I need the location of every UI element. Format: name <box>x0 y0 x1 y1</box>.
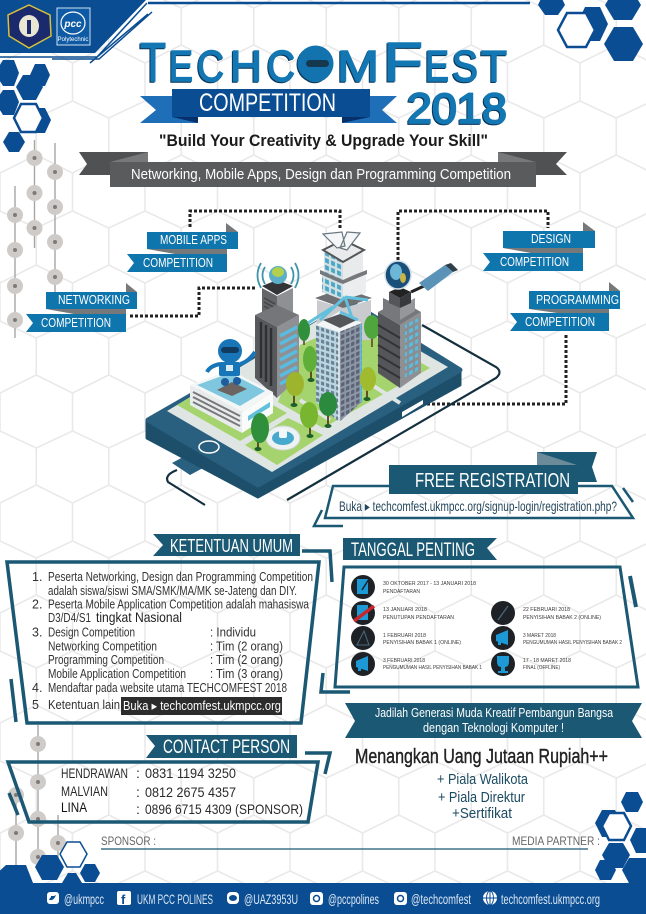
label: programming competition: COMPETITION <box>525 314 595 329</box>
banner: competition categories <box>79 152 567 187</box>
label: mobile apps competition: MOBILE APPS <box>160 233 227 247</box>
rules list: tingkat Nasional <box>96 609 182 625</box>
label: programming competition <box>510 282 620 331</box>
schedule dates: 13 JANUARI 2018 <box>383 607 427 613</box>
rules list: D3/D4/S1 <box>48 611 91 625</box>
footer social links: @UAZ3953U <box>244 891 298 907</box>
heading: tanggal penting: TANGGAL PENTING <box>351 540 475 561</box>
sponsor and media partner line <box>101 836 600 849</box>
illustration: isometric smartphone city <box>147 232 500 505</box>
title: TechcomFest <box>140 31 507 93</box>
panel: free registration <box>314 452 633 526</box>
schedule dates: PENGUMUMAN HASIL PENYISIHAN BABAK 1 <box>383 665 482 671</box>
trees behind <box>298 315 380 347</box>
title: TechcomFest: M <box>337 42 379 91</box>
icon: twitter <box>47 892 59 904</box>
schedule dates: 30 OKTOBER 2017 - 13 JANUARI 2018 <box>383 581 476 587</box>
label: mobile apps competition: COMPETITION <box>143 255 213 270</box>
rules list: 4. <box>32 681 42 695</box>
title: TechcomFest: E <box>169 42 193 91</box>
title: TechcomFest: H <box>230 42 262 91</box>
contact list: : <box>136 765 140 781</box>
schedule dates: 17 - 18 MARET 2018 <box>523 658 571 664</box>
label: networking competition: COMPETITION <box>41 315 111 330</box>
fountain <box>266 426 300 450</box>
schedule dates <box>383 581 622 671</box>
icon: USB plug <box>411 263 458 292</box>
title: TechcomFest: T <box>481 42 507 91</box>
left tower <box>255 280 299 398</box>
schedule dates: PENGUMUMAN HASIL PENYISIHAN BABAK 2 <box>523 640 622 646</box>
panel: tanggal penting <box>335 538 638 687</box>
contact list: : <box>136 801 140 817</box>
decorative beads: lower left <box>8 725 66 870</box>
schedule dates: 22 FEBRUARI 2018 <box>523 607 570 613</box>
contact list: 0831 1194 3250 <box>145 765 236 781</box>
schedule dates: 1 FEBRUARI 2018 <box>383 633 426 639</box>
footer social links: @ukmpcc <box>64 891 104 907</box>
contact list: HENDRAWAN <box>61 765 128 781</box>
heading: ketentuan umum: KETENTUAN UMUM <box>170 536 293 556</box>
rules list: Mobile Application Competition <box>48 667 186 681</box>
contact list: 0812 2675 4357 <box>145 784 236 800</box>
trees in front <box>251 346 376 451</box>
back tower <box>315 232 372 340</box>
center tower <box>308 297 368 422</box>
title: TechcomFest: C <box>267 42 295 91</box>
phone body <box>147 303 460 497</box>
rules list: 3. <box>32 626 42 640</box>
rules list: Programming Competition <box>48 653 164 667</box>
schedule dates: PENDAFTARAN <box>383 589 420 595</box>
schedule dates: FINAL (OFFLINE) <box>523 665 560 671</box>
icon: round 2 announcement <box>491 626 515 650</box>
title: TechcomFest: F <box>383 31 423 93</box>
schedule dates: PENUTUPAN PENDAFTARAN <box>383 615 454 621</box>
icon: round 1 announcement <box>351 652 375 676</box>
heading: year 2018: 2018 <box>407 85 507 133</box>
label: mobile apps competition <box>127 223 238 272</box>
contact list: LINA <box>61 799 88 815</box>
contact list <box>61 765 303 817</box>
icon: globe on right tower <box>385 261 411 289</box>
decorative hexagons: top right <box>538 0 643 61</box>
rules list: 2. <box>32 598 42 612</box>
icon: trophy <box>491 652 515 676</box>
robot mascot <box>207 339 255 396</box>
contact list: : <box>136 784 140 800</box>
phone connector <box>172 456 203 475</box>
low building <box>190 370 273 433</box>
label: design competition: COMPETITION <box>500 254 569 269</box>
panel: ketentuan umum <box>7 534 350 723</box>
label: networking competition <box>26 283 137 332</box>
prizes text <box>355 746 608 822</box>
label: networking competition: NETWORKING <box>58 293 130 307</box>
sponsor and media partner line: SPONSOR : <box>101 836 156 848</box>
heading: contact person <box>146 735 297 758</box>
icon: facebook <box>117 891 131 907</box>
header band with logos <box>0 0 530 63</box>
rules list: Peserta Mobile Application Competition adalah mahasiswa <box>48 598 309 612</box>
schedule dates: 3 FEBRUARI 2018 <box>383 658 425 664</box>
green city blocks <box>177 322 430 465</box>
prizes text: + Piala Walikota <box>437 771 529 788</box>
prizes text: + Piala Direktur <box>438 789 525 806</box>
banner: jadilah generasi muda <box>345 703 642 738</box>
footer social links <box>47 891 600 907</box>
cable <box>167 325 499 505</box>
label: design competition: DESIGN <box>531 232 571 246</box>
rules list: Buka ▸ techcomfest.ukmpcc.org <box>123 699 281 713</box>
decorative hexagons: top left <box>0 60 51 152</box>
rules list <box>32 570 313 715</box>
decorative beads: upper left <box>7 140 63 338</box>
title: TechcomFest: S <box>452 42 478 91</box>
rules list: Peserta Networking, Design dan Programming Competition <box>48 570 313 584</box>
tagline: "Build Your Creativity & Upgrade Your Skill" <box>159 131 488 150</box>
footer social links: UKM PCC POLINES <box>137 891 213 907</box>
icon: globe <box>483 891 497 905</box>
right tower <box>378 287 421 388</box>
rules list: Design Competition <box>48 626 135 640</box>
sponsor and media partner line: MEDIA PARTNER : <box>512 836 600 848</box>
rules list: Ketentuan lain <box>48 698 120 712</box>
icon: globe with wifi signal <box>258 263 298 288</box>
rules list: : Individu <box>210 626 256 640</box>
rules list: Mendaftar pada website utama TECHCOMFEST 2018 <box>48 681 287 695</box>
title: TechcomFest: O <box>301 42 330 91</box>
icon: PCC logo: pcc <box>63 19 82 30</box>
prizes text: +Sertifikat <box>452 805 513 822</box>
panel: free registration: FREE REGISTRATION <box>415 469 570 492</box>
contact list: MALVIAN <box>61 783 108 799</box>
rules list: 5 <box>32 698 39 712</box>
label: design competition <box>483 222 595 271</box>
icon: registration open <box>351 575 375 599</box>
schedule dates: PENYISIHAN BABAK 1 (ONLINE) <box>383 640 461 646</box>
rules list: : Tim (3 orang) <box>210 667 283 681</box>
banner: Competition <box>140 89 397 123</box>
footer social links: @pccpolines <box>328 891 379 907</box>
rules list: : Tim (2 orang) <box>210 653 283 667</box>
dotted connector lines <box>130 211 566 404</box>
icon: line <box>227 892 239 904</box>
icon: PCC logo: Polytechnic <box>58 37 88 43</box>
panel: contact person <box>8 735 330 822</box>
rules list: adalah siswa/siswi SMA/SMK/MA/MK se-Jateng dan DIY. <box>48 584 297 598</box>
banner: jadilah generasi muda: dengan Teknologi Komputer ! <box>423 720 564 735</box>
icon: instagram <box>310 892 323 905</box>
contact list: 0896 6715 4309 (SPONSOR) <box>145 801 303 817</box>
icon: round 2 <box>491 601 515 625</box>
icon: university logo <box>8 5 51 48</box>
decorative hexagons: bottom right <box>595 792 646 883</box>
heading: contact person: CONTACT PERSON <box>163 737 290 758</box>
icon: instagram <box>394 892 407 905</box>
title: TechcomFest: T <box>140 31 166 93</box>
icon: facebook: f <box>121 892 126 907</box>
title: TechcomFest: C <box>197 42 224 91</box>
icon: registration closed <box>351 601 375 625</box>
label: programming competition: PROGRAMMING <box>536 293 619 307</box>
icon: PCC logo <box>57 8 90 45</box>
rules list: : Tim (2 orang) <box>210 640 283 654</box>
heading: ketentuan umum <box>153 534 300 556</box>
banner: Competition: COMPETITION <box>199 89 336 117</box>
banner: competition categories: Networking, Mobile Apps, Design dan Programming Competition <box>131 167 511 183</box>
footer social links: @techcomfest <box>411 891 471 907</box>
rules list: Networking Competition <box>48 640 157 654</box>
footer band with hexagons <box>0 842 646 914</box>
icon: round 1 <box>351 626 375 650</box>
title: TechcomFest: E <box>425 42 449 91</box>
schedule dates: 3 MARET 2018 <box>523 633 556 639</box>
rules list: 1. <box>32 570 42 584</box>
schedule dates: PENYISIHAN BABAK 2 (ONLINE) <box>523 615 601 621</box>
